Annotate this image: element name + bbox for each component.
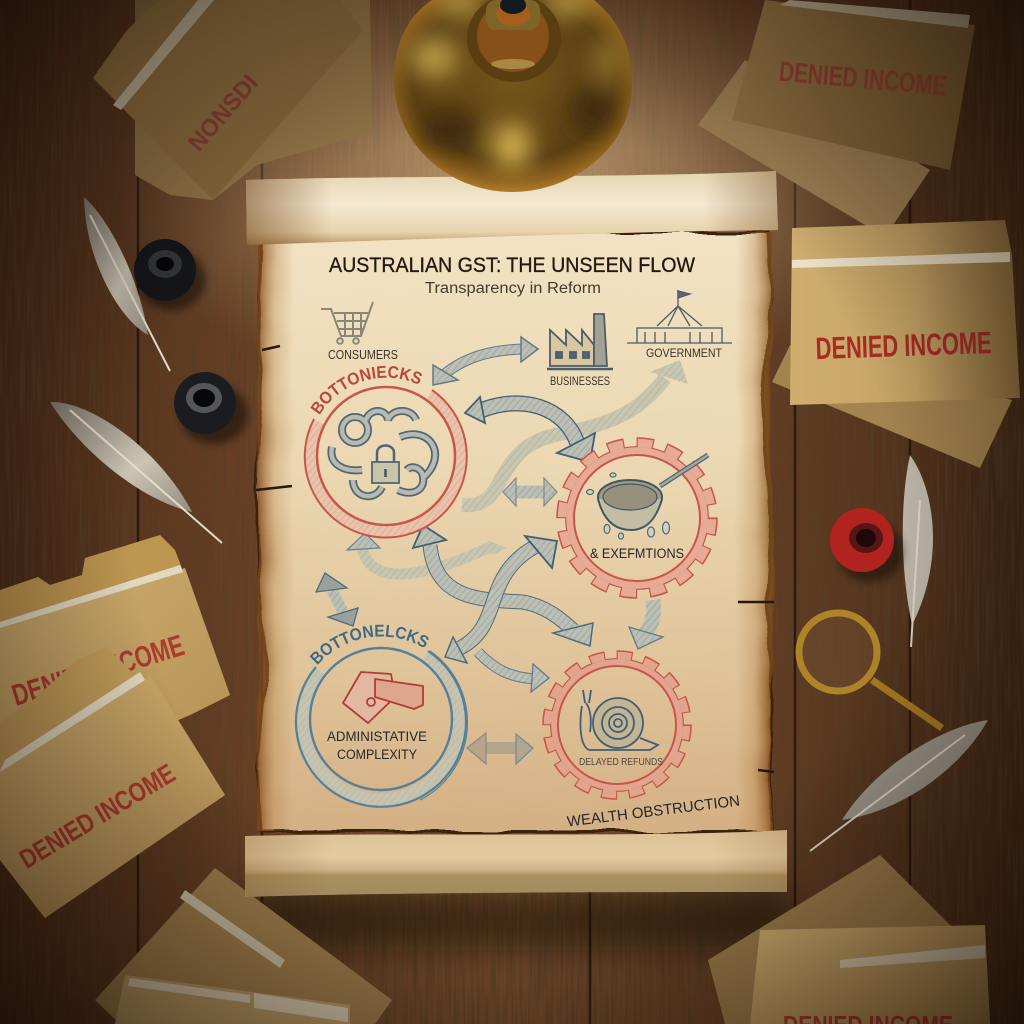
icon: snail bbox=[580, 690, 658, 750]
arrow: long diagonal to right bbox=[413, 525, 593, 646]
heading: bottlenecks red: BOTTONIECKS bbox=[310, 366, 422, 414]
icon: colander bbox=[586, 455, 708, 539]
arrow: lower diagonal bbox=[478, 652, 549, 692]
folder stack: top right bbox=[698, 0, 975, 237]
bottom roll bbox=[245, 830, 787, 897]
icon: tangled chains and padlock bbox=[331, 411, 435, 496]
icon: shopping cart bbox=[321, 302, 373, 344]
stamp: denied income top right: DENIED INCOME bbox=[778, 56, 948, 101]
flow arrows bbox=[316, 337, 688, 764]
subtitle: Transparency in Reform bbox=[425, 280, 601, 297]
folder stack: right middle bbox=[772, 220, 1020, 468]
stamp: back folder: DENIED INCOME bbox=[8, 629, 188, 713]
node: businesses: BUSINESSES bbox=[550, 374, 610, 388]
gear: exemptions bbox=[562, 442, 712, 594]
title: AUSTRALIAN GST: THE UNSEEN FLOW bbox=[329, 254, 695, 277]
circle: bottlenecks blue: ADMINISTATIVE bbox=[327, 729, 427, 744]
icon: ink bottle upper bbox=[134, 239, 206, 310]
icon: magnifying glass bbox=[799, 613, 942, 728]
arrow: down to snail gear bbox=[629, 600, 663, 649]
parchment sheet bbox=[246, 220, 786, 840]
lamp collar bbox=[467, 0, 561, 82]
icon: factory bbox=[547, 314, 613, 369]
icon: feather right upper bbox=[903, 455, 933, 647]
node: government: GOVERNMENT bbox=[646, 346, 723, 360]
icon: red ink bottle bbox=[830, 508, 904, 582]
label: wealth obstruction: WEALTH OBSTRUCTION bbox=[566, 792, 741, 831]
node: businesses bbox=[547, 314, 613, 388]
gear: delayed refunds bbox=[547, 655, 687, 795]
heading: bottlenecks blue: BOTTONELCKS bbox=[310, 624, 429, 665]
icon: feather left bbox=[50, 402, 222, 543]
icon: feather upper left bbox=[84, 197, 170, 371]
brass lamp bbox=[394, 0, 632, 192]
arrow: bottom double bbox=[467, 733, 533, 764]
icon: parliament house bbox=[627, 290, 732, 343]
folder stack: top left bbox=[93, 0, 372, 200]
icon: red wallet bbox=[343, 672, 423, 723]
scroll tears bbox=[256, 346, 774, 772]
arrow: sweep to government bbox=[462, 360, 688, 505]
arrow: large upward S curve bbox=[445, 536, 557, 663]
arrow: bottom left sweep bbox=[347, 533, 507, 574]
stamp: top left folder: NONSDI bbox=[183, 70, 264, 157]
arrow: left vertical double bbox=[316, 573, 358, 626]
parchment scroll bbox=[245, 171, 787, 897]
folder stack: left lower bbox=[0, 535, 230, 918]
circle: bottlenecks blue: COMPLEXITY bbox=[337, 747, 417, 762]
gear: delayed refunds: DELAYED REFUNDS bbox=[579, 756, 663, 768]
arrow: blue double sweep bbox=[465, 397, 595, 462]
lamp highlights bbox=[410, 0, 620, 170]
folder stack: bottom right bbox=[708, 855, 990, 1024]
arrow: centre double bbox=[503, 478, 557, 506]
circle: bottlenecks red bbox=[304, 366, 468, 538]
node: government bbox=[627, 290, 732, 360]
node: consumers: CONSUMERS bbox=[328, 348, 398, 362]
icon: ink bottle lower bbox=[174, 372, 248, 444]
folder stack: bottom left bbox=[95, 868, 392, 1024]
stamp: front folder: DENIED INCOME bbox=[14, 758, 181, 874]
node: consumers bbox=[321, 302, 398, 362]
gear: exemptions: & EXEFMTIONS bbox=[590, 546, 684, 561]
arrow: consumers to businesses bbox=[433, 337, 538, 385]
icon: feather right lower bbox=[810, 720, 988, 851]
circle: bottlenecks blue bbox=[294, 624, 468, 808]
top roll bbox=[246, 171, 778, 245]
